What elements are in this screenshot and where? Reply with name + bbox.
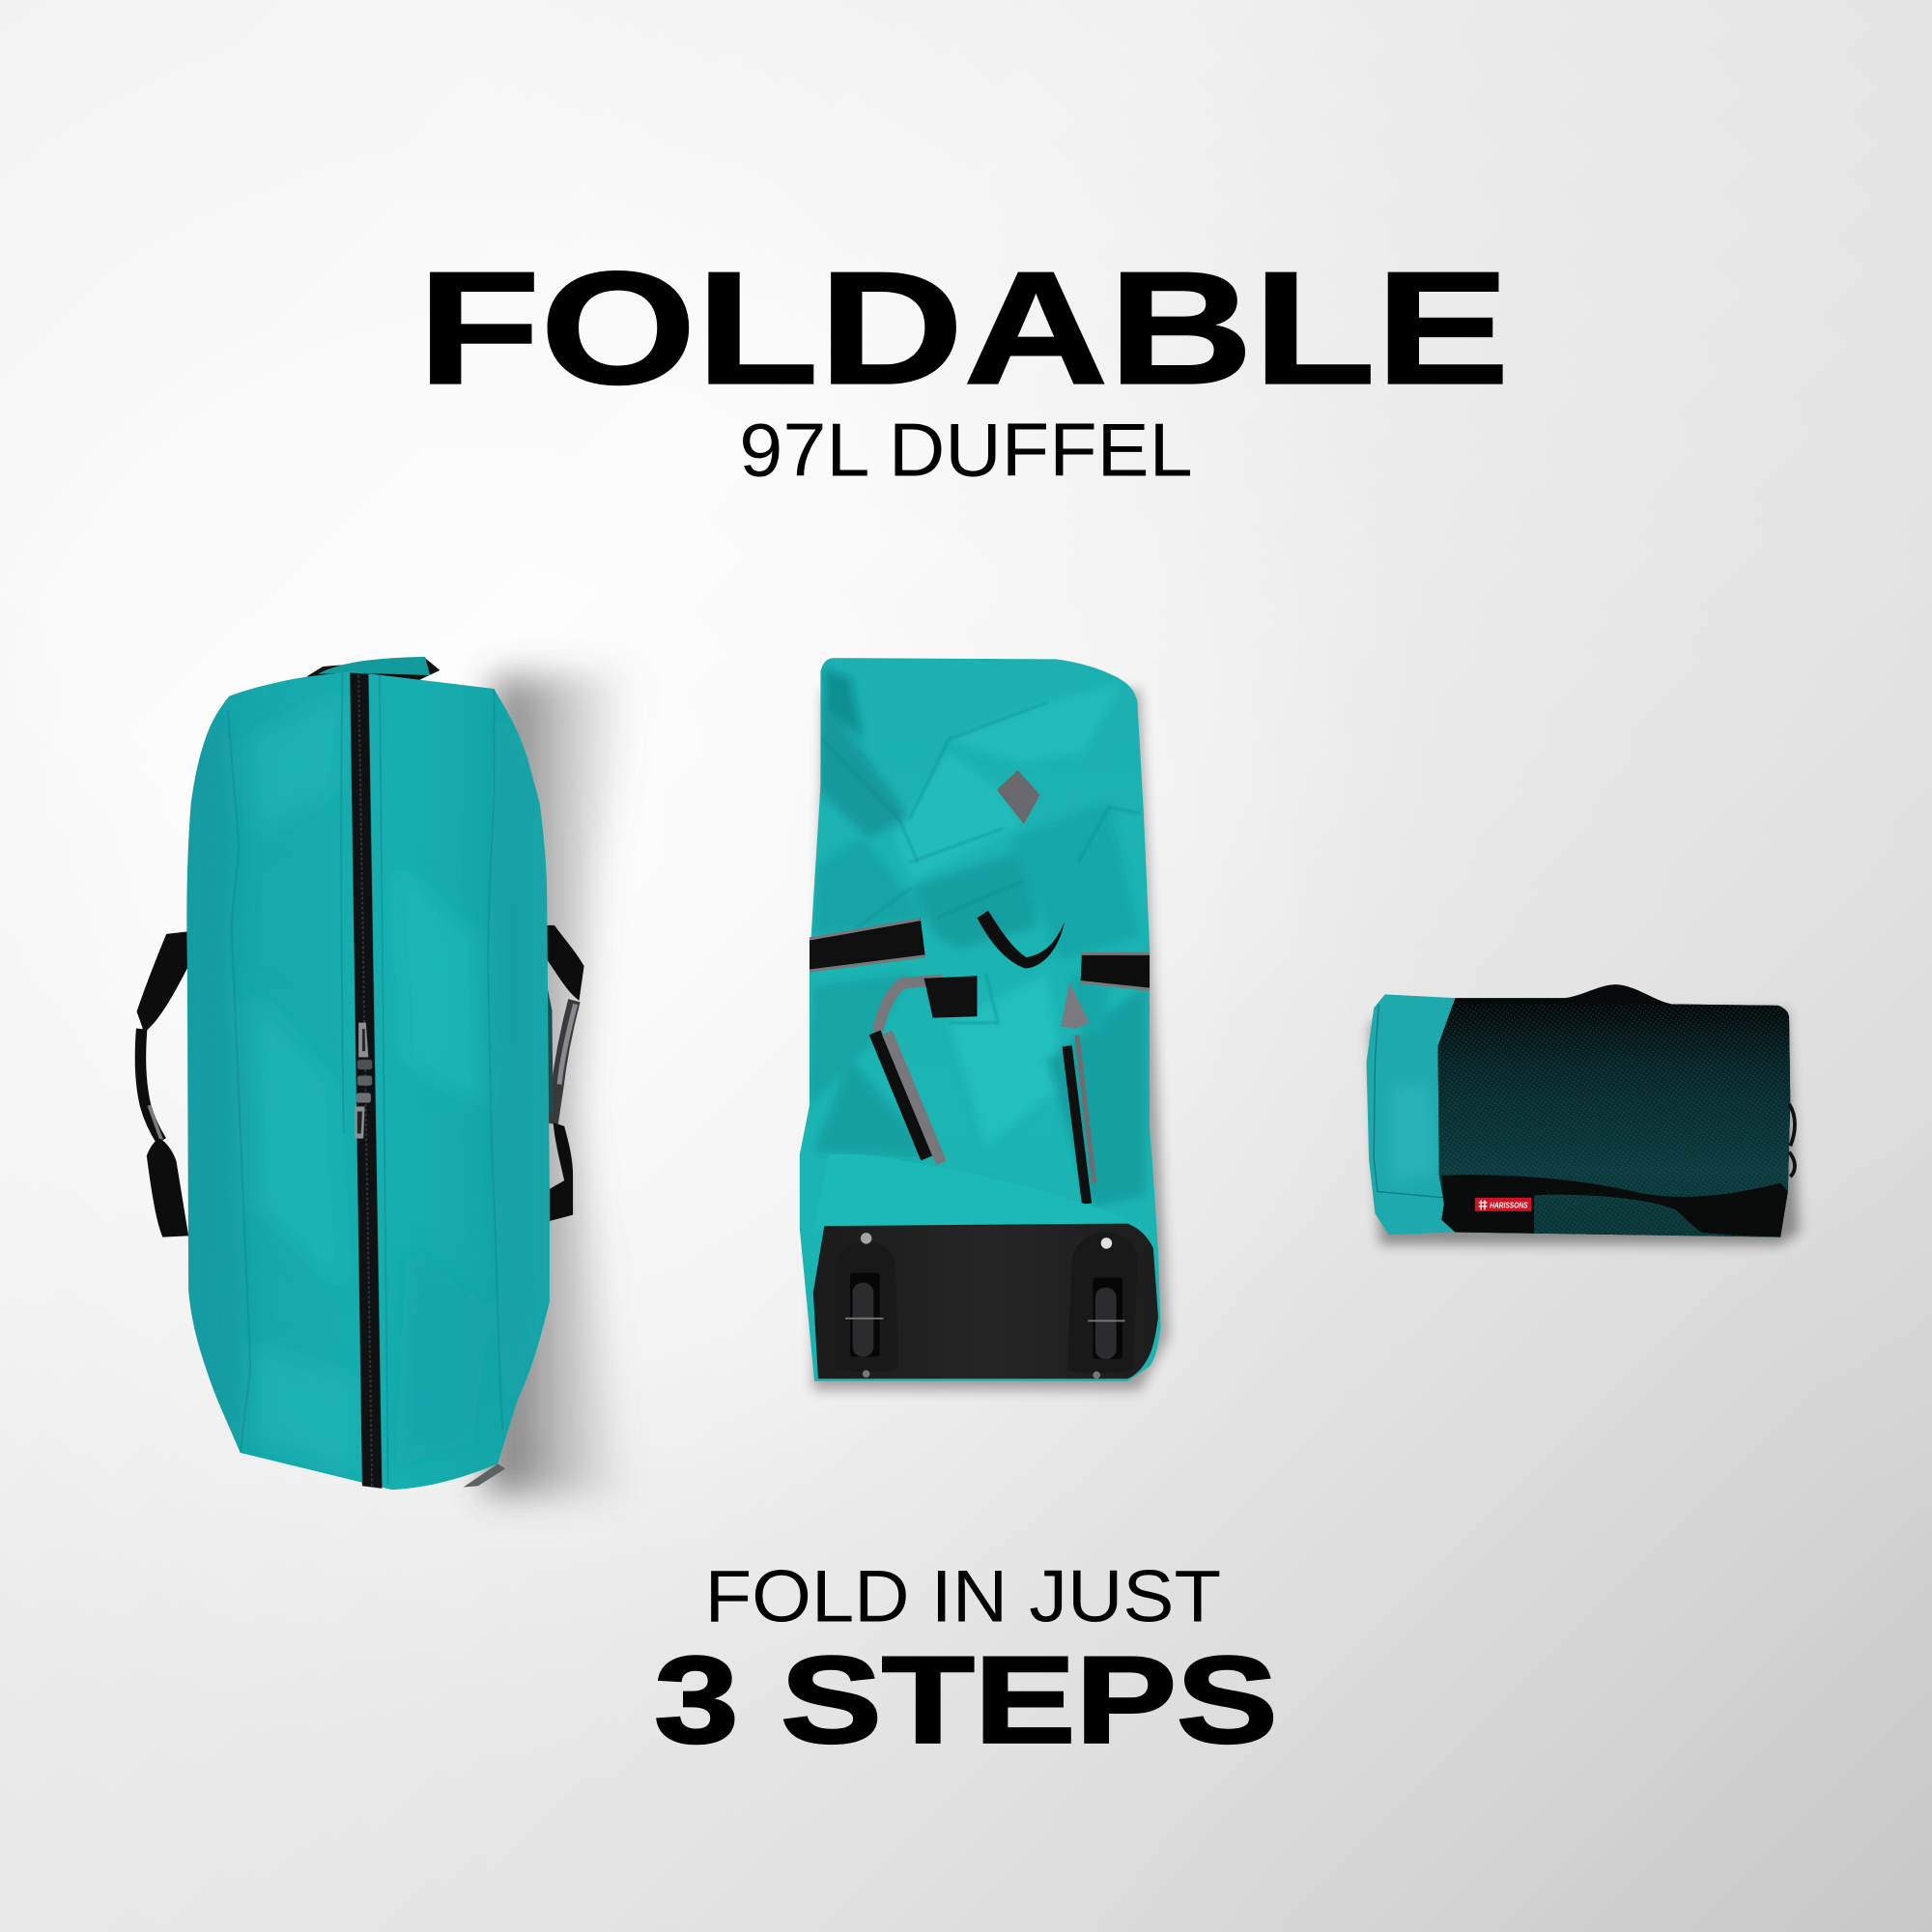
drop shadow <box>1370 1010 1799 1244</box>
right compression band <box>1081 952 1150 989</box>
product: unfolded duffel bag <box>137 657 635 1495</box>
subtitle: 97L DUFFEL: 97L DUFFEL <box>739 409 1193 492</box>
centre zipper <box>350 672 382 1489</box>
title: FOLDABLE: FOLDABLE <box>417 240 1509 418</box>
fabric wrinkles and seams <box>187 671 549 1485</box>
black inner loop <box>977 911 1065 969</box>
zipper pulls <box>355 1023 372 1139</box>
headline: 3 STEPS: 3 STEPS <box>654 1633 1278 1770</box>
main body <box>186 671 550 1490</box>
folded-over flap <box>813 1154 1127 1233</box>
right end loops <box>1789 1104 1795 1177</box>
folded fabric body <box>800 658 1161 1381</box>
brand label: HARISSONS <box>1490 1201 1528 1210</box>
bottom strap <box>464 1463 505 1488</box>
top carry handle <box>307 657 440 680</box>
caption: FOLD IN JUST: FOLD IN JUST <box>705 1556 1221 1638</box>
grey webbing tab <box>997 770 1040 824</box>
mesh pouch <box>1438 984 1790 1237</box>
brand label <box>1475 1198 1531 1211</box>
right wheel housing <box>1067 1233 1137 1378</box>
left wheel housing <box>835 1233 898 1378</box>
left compression band <box>810 918 925 972</box>
left handle strap <box>875 976 977 1163</box>
lower drawstring band <box>1441 1175 1788 1237</box>
drop shadow <box>813 690 1168 1390</box>
wheel base panel <box>813 1224 1158 1378</box>
right side handle <box>547 925 584 1221</box>
product: half-folded duffel with wheel base <box>800 658 1168 1390</box>
teal end cap <box>1367 994 1455 1235</box>
product: fully folded duffel in mesh pouch <box>1367 984 1799 1244</box>
fabric creases <box>807 669 1146 1208</box>
cast shadow <box>487 670 635 1495</box>
left side handle <box>137 931 188 1237</box>
right handle strap <box>1061 982 1094 1204</box>
